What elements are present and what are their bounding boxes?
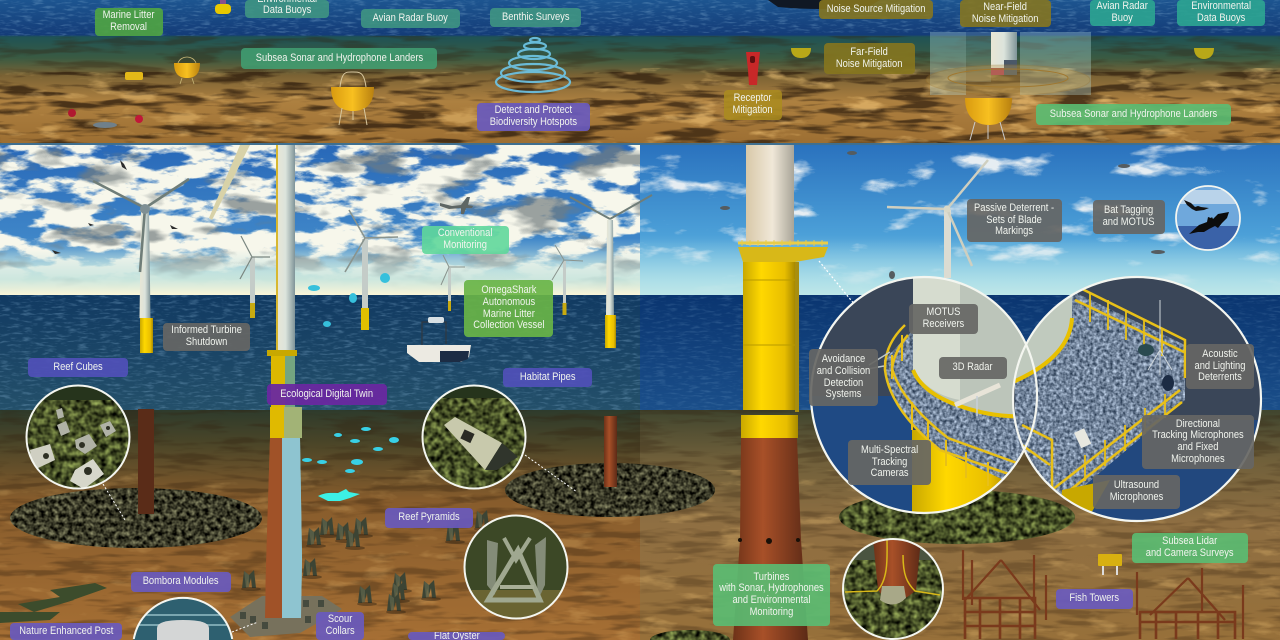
label: Ecological Digital Twin xyxy=(267,384,387,405)
label: Habitat Pipes xyxy=(503,368,592,387)
label: Far-Field Noise Mitigation xyxy=(824,43,915,74)
label: Informed Turbine Shutdown xyxy=(163,323,250,351)
label: Receptor Mitigation xyxy=(724,90,782,120)
label: MOTUS Receivers xyxy=(909,304,978,334)
label: Subsea Lidar and Camera Surveys: Subsea Lidar xyxy=(1162,535,1218,547)
label: Detect and Protect Biodiversity Hotspots: Detect and Protect xyxy=(495,104,572,116)
label: Nature Enhanced Post xyxy=(10,623,122,640)
pile left xyxy=(138,409,154,514)
label: Conventional Monitoring: Conventional xyxy=(438,227,493,239)
label: Environmental Data Buoys (right): Environmental xyxy=(1191,0,1251,12)
dashed leader: platform xyxy=(819,261,855,305)
label: Passive Deterrent: Passive Deterrent - xyxy=(974,202,1055,214)
reef pyramid field xyxy=(241,510,494,614)
label: Ecological Digital Twin: Ecological Digital Twin xyxy=(281,388,373,400)
fish tower left xyxy=(963,550,1046,639)
label: Habitat Pipes: Habitat Pipes xyxy=(520,371,575,383)
icon: red receptor device xyxy=(746,52,760,85)
label: Benthic Surveys xyxy=(490,8,581,27)
blade of the foreground turbine xyxy=(209,145,250,220)
label: Passive Deterrent xyxy=(967,199,1062,242)
label: Reef Pyramids: Reef Pyramids xyxy=(398,511,460,523)
top strip left: sea surface and seabed xyxy=(0,0,640,144)
label: Avian Radar Buoy (right): Avian Radar xyxy=(1097,0,1148,12)
main panel left: seabed xyxy=(0,410,640,640)
label: Scour Collars: Collars xyxy=(325,625,355,637)
label: Environmental Data Buoys (right): Data Buoys xyxy=(1197,12,1245,24)
label: Avoidance and Collision Detection Systems: Detection xyxy=(824,376,863,388)
label: Bombora Modules xyxy=(131,572,231,592)
label: Noise Source Mitigation xyxy=(819,0,933,19)
label: Reef Cubes xyxy=(28,358,128,377)
inset: bombora module xyxy=(133,597,233,640)
label: Environmental Data Buoys (left) xyxy=(245,0,329,18)
label: Informed Turbine Shutdown: Shutdown xyxy=(186,336,227,348)
icon: large hemispherical lander xyxy=(331,72,374,125)
subsea survey rover xyxy=(1098,554,1122,575)
label: Fish Towers: Fish Towers xyxy=(1070,592,1119,604)
label: Avian Radar Buoy (right) xyxy=(1090,0,1155,26)
label: Multi-Spectral Tracking Cameras: Multi-Spectral xyxy=(861,444,918,456)
label: Near-Field Noise Mitigation xyxy=(960,0,1051,27)
label: Bat Tagging and MOTUS: Bat Tagging xyxy=(1104,204,1154,216)
label: Environmental Data Buoys (left): Data Buoys xyxy=(263,4,311,16)
label: Directional Tracking Microphones and Fixed Microphones: Directional xyxy=(1176,418,1220,430)
foreground jacket tower right xyxy=(733,145,828,640)
label: 3D Radar xyxy=(939,357,1007,379)
label: OmegaShark vessel: OmegaShark xyxy=(481,284,536,296)
label: MOTUS Receivers: MOTUS xyxy=(927,306,960,318)
icon: bubble curtain xyxy=(926,32,1091,95)
label: Noise Source Mitigation: Noise Source Mitigation xyxy=(827,3,925,15)
label: Near-Field Noise Mitigation: Near-Field xyxy=(984,1,1027,13)
label: Turbines with Sonar, Hydrophones and Environmental Monitoring xyxy=(713,564,830,626)
main panel left: sea xyxy=(0,295,640,412)
label: Avoidance and Collision Detection Systems: Avoidance xyxy=(822,353,865,365)
icon: distant lander right xyxy=(1194,48,1214,59)
turbine 3 xyxy=(345,210,398,330)
label: Turbines with Sonar, Hydrophones and Environmental Monitoring: and Environmental xyxy=(733,594,810,606)
label: Multi-Spectral Tracking Cameras: Cameras xyxy=(871,467,908,479)
label: Passive Deterrent: Sets of Blade xyxy=(987,214,1042,226)
nature enhanced mats xyxy=(0,583,107,623)
label: Marine Litter Removal xyxy=(95,8,163,36)
label: Receptor Mitigation: Receptor xyxy=(734,92,772,104)
label: Subsea Lidar and Camera Surveys xyxy=(1132,533,1248,563)
label: Acoustic and Lighting Deterrents: Acoustic xyxy=(1202,348,1238,360)
label: Bat Tagging and MOTUS xyxy=(1093,200,1165,234)
label: Ultrasound Microphones: Microphones xyxy=(1110,491,1163,503)
main panel right: sky xyxy=(640,145,1280,295)
label: Avian Radar Buoy (right): Buoy xyxy=(1112,12,1133,24)
icon: surface buoy xyxy=(215,0,231,14)
label: Subsea Lidar and Camera Surveys: and Camera Surveys xyxy=(1146,547,1234,559)
rock reef mound centre xyxy=(505,463,715,517)
foreground monopile with digital twin xyxy=(265,145,302,618)
turbine 4 xyxy=(441,255,465,311)
icon: vessel hull xyxy=(768,0,880,9)
label: Turbines with Sonar, Hydrophones and Environmental Monitoring: Turbines xyxy=(753,571,790,583)
pile centre xyxy=(604,416,617,487)
label: Acoustic and Lighting Deterrents: and Lighting xyxy=(1195,360,1245,372)
inset ring borders xyxy=(26,386,568,639)
distant turbine right xyxy=(887,160,988,278)
scour inset ring xyxy=(843,539,943,639)
cyan fish shoal xyxy=(302,427,399,473)
label: Bombora Modules: Bombora Modules xyxy=(143,575,219,587)
icon: far hemispherical lander xyxy=(174,57,200,84)
turbine 1 xyxy=(93,179,189,353)
label: Avoidance and Collision Detection Systems: Systems xyxy=(826,388,861,400)
inset: platform left with radar and cameras xyxy=(811,276,1040,514)
label: Reef Cubes: Reef Cubes xyxy=(53,361,103,373)
icon: bat large xyxy=(1189,212,1229,234)
rock reef mound right xyxy=(839,490,1075,544)
label: Directional Tracking Microphones and Fixed Microphones: Tracking Microphones xyxy=(1152,429,1244,441)
label: Marine Litter Removal: Marine Litter xyxy=(103,9,155,21)
label: Multi-Spectral Tracking Cameras xyxy=(848,440,931,485)
main panel left: sky xyxy=(0,145,640,295)
main panel right: seabed xyxy=(640,410,1280,640)
inset: reef cubes xyxy=(27,385,130,490)
main panel right: sea xyxy=(640,295,1280,412)
label: Acoustic and Lighting Deterrents: Deterrents xyxy=(1198,371,1242,383)
label: Near-Field Noise Mitigation: Noise Mitigation xyxy=(972,12,1039,24)
label: Receptor Mitigation: Mitigation xyxy=(733,104,773,116)
label: Avian Radar Buoy (left) xyxy=(361,9,460,28)
big inset ring borders xyxy=(811,277,1261,521)
label: Ultrasound Microphones xyxy=(1093,475,1180,509)
label: Multi-Spectral Tracking Cameras: Tracking xyxy=(872,456,907,468)
inset: scour pile with cable xyxy=(842,539,944,640)
label: Directional Tracking Microphones and Fixed Microphones xyxy=(1142,415,1254,469)
label: 3D Radar: 3D Radar xyxy=(953,361,993,373)
icon: small yellow lander xyxy=(125,72,143,80)
icon: large lander xyxy=(965,98,1012,140)
label: Detect and Protect Biodiversity Hotspots: Biodiversity Hotspots xyxy=(490,116,577,128)
reef mound at bottom edge xyxy=(650,630,730,640)
rock reef mound left xyxy=(10,488,262,548)
birds right xyxy=(720,151,1165,279)
label: MOTUS Receivers: Receivers xyxy=(923,318,964,330)
label: Far-Field Noise Mitigation: Noise Mitigation xyxy=(836,58,903,70)
label: Avoidance and Collision Detection Systems: and Collision xyxy=(817,365,870,377)
label: Benthic Surveys: Benthic Surveys xyxy=(502,11,569,23)
label: Directional Tracking Microphones and Fixed Microphones: Microphones xyxy=(1171,453,1225,465)
turbine 2 xyxy=(240,236,270,318)
strip divider xyxy=(0,143,1280,145)
label: Scour Collars xyxy=(316,612,364,640)
label: Conventional Monitoring: Monitoring xyxy=(444,239,487,251)
label: Avian Radar Buoy (left): Avian Radar Buoy xyxy=(373,12,448,24)
label: Scour Collars: Scour xyxy=(328,613,352,625)
label: OmegaShark vessel xyxy=(464,280,553,337)
ecological twin cyan creatures, sky xyxy=(308,273,390,327)
label: Environmental Data Buoys (right) xyxy=(1177,0,1265,26)
label: OmegaShark vessel: Marine Litter xyxy=(483,308,534,320)
turbine 6 xyxy=(570,195,652,348)
dashed leader: reef cubes xyxy=(103,484,125,520)
dashed leader: habitat pipes xyxy=(525,455,577,492)
label: Subsea Sonar and Hydrophone Landers (left): Subsea Sonar and Hydrophone Landers xyxy=(255,52,423,64)
icon: litter items xyxy=(68,109,143,128)
icon: pile under installation xyxy=(991,32,1017,75)
dashed leader: bombora xyxy=(232,622,258,632)
label: Passive Deterrent: Markings xyxy=(996,225,1033,237)
inset: habitat pipes xyxy=(422,385,526,490)
label: Ultrasound Microphones: Ultrasound xyxy=(1114,479,1159,491)
label: Flat Oyster xyxy=(408,632,505,640)
label: Fish Towers xyxy=(1056,589,1133,609)
icon: distant lander xyxy=(791,48,811,58)
inset: platform right with deterrents and microphones xyxy=(1013,276,1261,524)
cyan whale xyxy=(318,489,360,501)
label: Avoidance and Collision Detection Systems xyxy=(809,349,878,406)
label: OmegaShark vessel: Collection Vessel xyxy=(473,319,544,331)
monitoring aircraft xyxy=(440,197,473,214)
label: Far-Field Noise Mitigation: Far-Field xyxy=(851,46,888,58)
label: Marine Litter Removal: Removal xyxy=(111,21,147,33)
turbine 5 xyxy=(552,245,583,315)
autonomous litter vessel xyxy=(407,317,471,362)
scour protection hexagon xyxy=(230,438,342,637)
label: Subsea Sonar and Hydrophone Landers (right): Subsea Sonar and Hydrophone Landers xyxy=(1050,108,1217,120)
icon: benthic survey spiral xyxy=(496,38,570,92)
bat inset ring xyxy=(1176,186,1240,250)
label: Conventional Monitoring xyxy=(422,226,509,254)
wind turbines, background left xyxy=(93,179,652,353)
label: OmegaShark vessel: Autonomous xyxy=(482,296,535,308)
label: Directional Tracking Microphones and Fixed Microphones: and Fixed xyxy=(1177,441,1219,453)
label: Subsea Sonar and Hydrophone Landers (right) xyxy=(1036,104,1231,125)
inset: reef pyramid xyxy=(465,516,568,620)
top strip right: sea surface and seabed xyxy=(640,0,1280,144)
label: Nature Enhanced Post: Nature Enhanced Post xyxy=(19,625,113,637)
inset: bats xyxy=(1177,186,1239,250)
label: Turbines with Sonar, Hydrophones and Environmental Monitoring: with Sonar, Hydrophones xyxy=(719,582,824,594)
fish tower right xyxy=(1137,568,1243,639)
birds xyxy=(52,160,178,254)
label: Turbines with Sonar, Hydrophones and Environmental Monitoring: Monitoring xyxy=(750,606,793,618)
label: Subsea Sonar and Hydrophone Landers (left) xyxy=(241,48,437,69)
label: Bat Tagging and MOTUS: and MOTUS xyxy=(1103,216,1155,228)
label: Reef Pyramids xyxy=(385,508,473,528)
label: Acoustic and Lighting Deterrents xyxy=(1186,344,1254,389)
label: Detect and Protect Biodiversity Hotspots xyxy=(477,103,590,131)
label: Informed Turbine Shutdown: Informed Turbine xyxy=(171,324,242,336)
icon: bat small xyxy=(1184,200,1209,211)
